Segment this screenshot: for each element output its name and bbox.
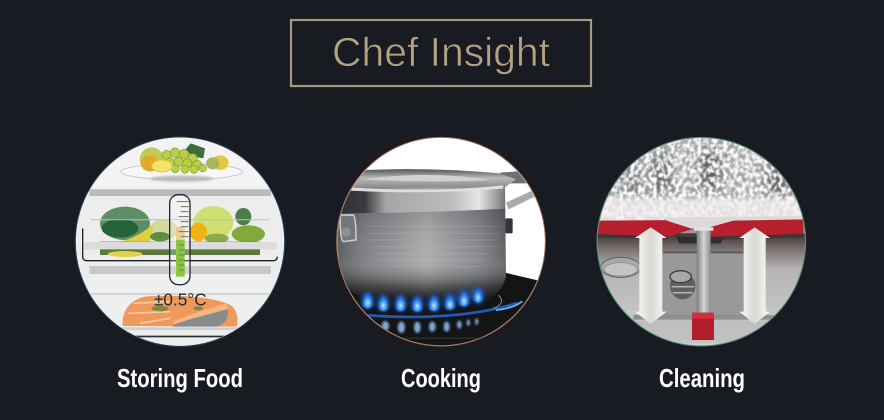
upper shelf drawer [83, 189, 277, 261]
icon: pot body [330, 187, 506, 303]
icon: pot lid [350, 169, 516, 191]
center column [694, 227, 713, 313]
title: Chef Insight [332, 29, 551, 75]
panel: cooking photo [330, 130, 550, 350]
icon: pot handle [506, 190, 536, 209]
filter part [601, 257, 695, 299]
lower interior [590, 233, 810, 350]
water spray [599, 138, 804, 224]
icon: plate of fruit [121, 143, 242, 182]
temperature label: ±0.5°C [154, 290, 207, 310]
icon: right double arrow [739, 227, 770, 324]
red spray arm [597, 216, 803, 243]
red base [692, 313, 714, 340]
icon: left double arrow [635, 227, 667, 324]
icon: vegetables [100, 206, 265, 257]
lower shelf drawer [89, 266, 271, 337]
title box [291, 20, 591, 86]
panel: cleaning photo [596, 136, 806, 346]
thermometer gauge [170, 195, 190, 285]
icon: pot side handle [340, 215, 513, 242]
label: cooking: Cooking [401, 363, 481, 393]
panel: storing food photo [70, 130, 290, 350]
icon: blue flames [362, 287, 522, 339]
icon: salmon [123, 296, 237, 327]
label: cleaning: Cleaning [659, 363, 745, 393]
bottom floor [636, 321, 768, 344]
cooktop [338, 256, 538, 346]
drawer outline [83, 228, 277, 261]
label: storing food: Storing Food [117, 363, 243, 393]
